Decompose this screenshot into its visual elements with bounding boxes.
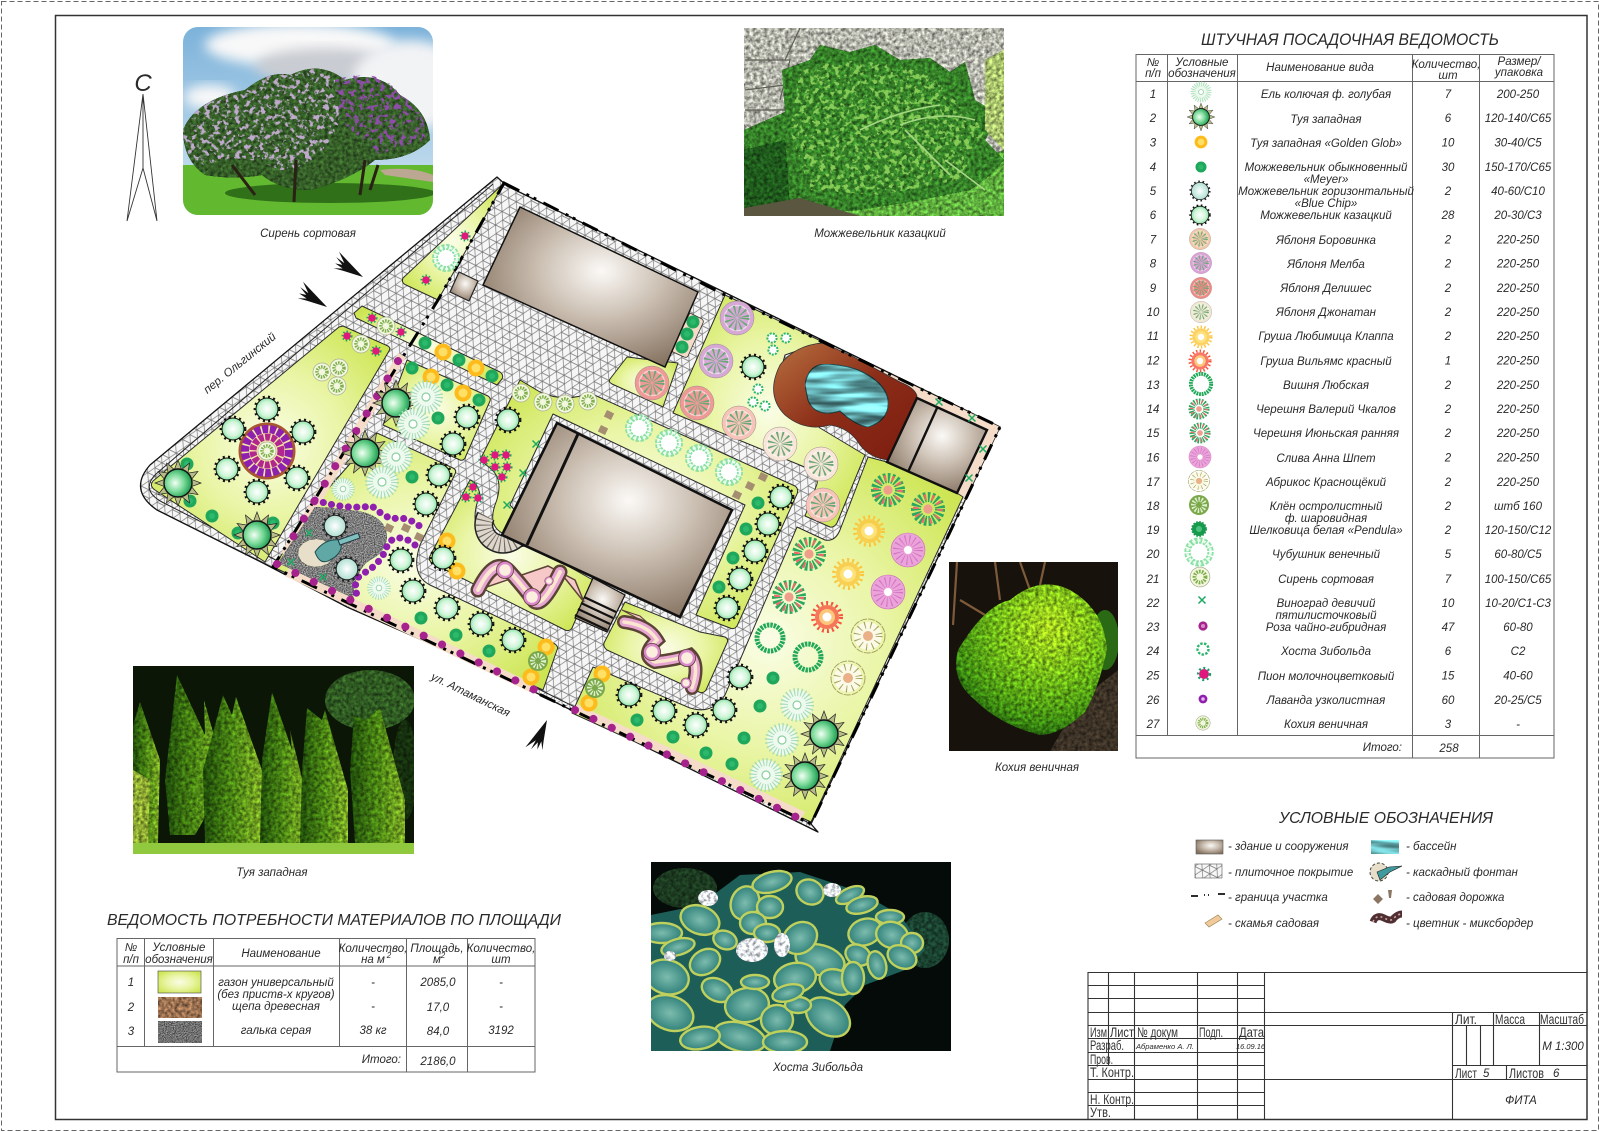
spiral stair [484,516,520,544]
row numbers: 19 [1147,525,1160,537]
species names: Можжевельник обыкновенный [1245,162,1408,174]
sizes: 150-170/С65 [1485,162,1552,174]
sizes: 220-250 [1496,452,1540,464]
sizes: 220-250 [1496,283,1540,295]
row numbers: 6 [1150,210,1157,222]
stamp labels: Масштаб [1540,1011,1584,1027]
materials header: п/п [123,954,140,966]
material rows: - [499,977,503,989]
apple trees [635,301,840,522]
north arrow: С [134,70,152,97]
row numbers: 14 [1147,404,1159,416]
sizes: 120-140/С65 [1485,113,1552,125]
legend labels: - здание и сооружения [1228,841,1349,853]
parthenocissus vines [288,398,986,580]
quantities: 15 [1442,670,1455,682]
materials total: Итого: [362,1054,401,1066]
stamp labels: Лит. [1455,1011,1477,1027]
table header: Размер/ [1498,56,1542,68]
stamp values: 6 [1553,1068,1560,1080]
row numbers: 26 [1146,695,1160,707]
sizes [1485,89,1552,731]
species names: Яблоня Мелба [1286,259,1365,271]
species names: Черешня Июньская ранняя [1253,428,1399,440]
pool [805,364,888,427]
sizes: 220-250 [1496,258,1540,270]
sizes: С2 [1511,646,1526,658]
material rows: (без приств-х кругов) [217,989,335,1001]
table header [1145,56,1543,82]
stamp labels: № докум [1137,1024,1178,1040]
materials header [123,942,535,966]
material rows: - [371,977,375,989]
row numbers: 3 [1150,138,1157,150]
caption: thuja: Туя западная [236,867,308,879]
species names: Роза чайно-гибридная [1266,622,1386,634]
street label: lane: пер. Ольгинский [202,331,279,396]
lawns [151,183,963,822]
golden thuja [422,344,610,712]
quantities: 7 [1445,574,1452,586]
sizes: 40-60/С10 [1491,186,1545,198]
species names: Чубушник венечный [1272,549,1381,561]
quantities: 2 [1444,283,1452,295]
title block [1088,972,1587,1120]
stamp labels: Т. Контр. [1090,1064,1134,1080]
north arrow [127,70,157,221]
stamp labels [1090,1011,1584,1120]
quantities: 2 [1444,452,1452,464]
planting table title: ШТУЧНАЯ ПОСАДОЧНАЯ ВЕДОМОСТЬ [1201,31,1499,49]
quantities: 2 [1444,501,1452,513]
materials header: № [125,942,138,954]
street label: street: ул. Атаманская [428,671,512,720]
small kiosk [450,272,478,301]
sizes: 100-150/С65 [1485,574,1552,586]
quantities: 1 [1445,356,1451,368]
species names: ф. шаровидная [1285,513,1367,525]
gravel garden [278,507,387,598]
row numbers: 21 [1146,574,1159,586]
cherry, pear, plum, apricot [528,478,940,698]
quantities: 2 [1444,186,1452,198]
site plan [141,177,1000,832]
material rows: 2085,0 [419,977,456,989]
species names: Яблоня Боровинка [1275,235,1376,247]
row numbers: 7 [1150,234,1157,246]
sizes: 220-250 [1496,477,1540,489]
sizes: 220-250 [1496,234,1540,246]
materials header: 2 [386,951,392,960]
photo: lilac [183,27,433,215]
mixborder bed 2 [622,610,696,688]
quantities: 2 [1444,331,1452,343]
material rows: 17,0 [427,1002,450,1014]
row numbers: 22 [1146,598,1160,610]
material rows: 1 [128,977,134,989]
material rows [127,977,514,1038]
species names: Пион молочноцветковый [1258,671,1395,683]
table header: № [1147,57,1160,69]
quantities: 47 [1442,622,1455,634]
materials header: 2 [440,951,446,960]
caption: juniper: Можжевельник казацкий [814,228,946,240]
quantities: 7 [1445,89,1452,101]
material rows: 3 [128,1026,135,1038]
peach west and south strips [285,355,803,816]
material rows: 84,0 [427,1026,450,1038]
row numbers: 24 [1146,646,1159,658]
row numbers: 2 [1149,113,1157,125]
quantities: 6 [1445,646,1452,658]
row numbers: 17 [1147,477,1160,489]
photo: juniper [744,28,1004,216]
photo: hosta [641,862,951,1057]
stamp values [1135,1041,1584,1107]
stamp labels: Лист [1110,1024,1134,1040]
street inner line [149,184,811,824]
species names: Яблоня Джонатан [1275,307,1377,319]
table header: упаковка [1494,67,1543,79]
junipers: dots [180,316,780,770]
legend labels: - садовая дорожка [1406,892,1504,904]
stamp labels: Лист [1455,1065,1477,1081]
sizes: 40-60 [1503,670,1533,682]
stamp values: 16.09.16 [1236,1042,1266,1051]
species names: Туя западная «Golden Glob» [1250,138,1402,150]
stamp values: ФИТА [1505,1095,1537,1107]
caption: kochia: Кохия веничная [995,762,1079,774]
materials header: Количество, [467,943,535,955]
species names: «Meyer» [1304,174,1348,186]
material rows: - [499,1001,503,1013]
row numbers: 12 [1147,356,1160,368]
mixborder bed 1 [478,561,584,606]
peach planting pad [672,313,703,357]
legend labels: - граница участка [1228,892,1328,904]
stamp values: М 1:300 [1542,1041,1584,1053]
material rows: 2 [127,1002,135,1014]
stamp labels: Разраб. [1090,1037,1124,1053]
total row: 258 [1438,743,1459,755]
row numbers: 5 [1150,186,1157,198]
quantities: 30 [1442,162,1455,174]
materials table title: ВЕДОМОСТЬ ПОТРЕБНОСТИ МАТЕРИАЛОВ ПО ПЛОЩАДИ [107,912,562,929]
sizes: 220-250 [1496,404,1540,416]
species names: пятилисточковый [1275,610,1377,622]
species names: Ель колючая ф. голубая [1261,89,1391,101]
species names: Абрикос Краснощёкий [1265,477,1387,489]
entrance porch and steps [575,578,625,632]
sizes: 220-250 [1496,380,1540,392]
species names: Черешня Валерий Чкалов [1256,404,1396,416]
legend [1191,840,1534,930]
sizes: 60-80/С5 [1494,549,1542,561]
row numbers: 9 [1150,283,1157,295]
species names: Слива Анна Шпет [1276,453,1376,465]
legend labels: - плиточное покрытие [1228,867,1353,879]
sizes: 200-250 [1496,89,1540,101]
entrance arrows [295,252,553,753]
peonies [342,231,512,503]
quantities: 6 [1445,113,1452,125]
quantities: 10 [1442,138,1455,150]
row numbers: 8 [1150,258,1157,270]
sizes: 120-150/С12 [1485,525,1552,537]
symbols column [1186,83,1215,730]
photo: thuja [133,666,417,854]
quantities: 2 [1444,404,1452,416]
row numbers: 23 [1146,622,1160,634]
row numbers: 1 [1150,89,1156,101]
quantities: 10 [1442,598,1455,610]
quantities: 5 [1445,549,1452,561]
pavilion [887,398,987,493]
table header: обозначения [1168,68,1236,80]
species names: «Blue Chip» [1295,198,1357,210]
sizes: 220-250 [1496,428,1540,440]
row numbers: 18 [1147,501,1160,513]
row numbers: 20 [1146,549,1160,561]
material swatches [158,971,202,1043]
quantities: 2 [1444,380,1452,392]
building: north [483,207,698,367]
mock orange [434,246,741,484]
material rows: галька серая [241,1025,311,1037]
sizes: 220-250 [1496,356,1540,368]
stamp labels: Утв. [1090,1104,1111,1120]
quantities: 60 [1442,695,1455,707]
quantities: 2 [1444,428,1452,440]
sizes: 220-250 [1496,307,1540,319]
materials header: Наименование [241,948,321,960]
materials total [362,1054,456,1068]
quantities [1441,89,1455,731]
sizes: 60-80 [1503,622,1533,634]
rose rows [277,361,796,817]
materials header: обозначения [145,954,213,966]
sizes: - [1516,719,1520,731]
peach east strip [823,342,1000,500]
species names: Груша Вильямс красный [1260,356,1392,368]
sizes: 20-30/С3 [1493,210,1542,222]
legend labels: - бассейн [1406,841,1457,853]
legend labels [1228,841,1534,930]
blue spruce [332,382,812,790]
blue chip juniper [323,514,359,581]
species names: Сирень сортовая [1278,574,1374,586]
row numbers: 10 [1147,307,1160,319]
materials total: 2186,0 [419,1056,456,1068]
lavender rows [315,500,423,597]
quantities: 3 [1445,719,1452,731]
row numbers: 16 [1147,452,1160,464]
row numbers: 27 [1146,719,1160,731]
sizes: 10-20/С1-С3 [1485,598,1552,610]
material rows: 38 кг [359,1025,387,1037]
legend swatches [1191,840,1402,927]
lilac shrubs [313,317,597,413]
species names: Туя западная [1290,114,1362,126]
building: central [502,423,732,617]
quantities: 2 [1444,525,1452,537]
materials header: на м [361,954,385,966]
garden path tiles [384,410,768,542]
species names: Груша Любимица Клаппа [1258,331,1394,343]
sizes: 220-250 [1496,331,1540,343]
materials header: м [433,954,441,966]
materials header: Площадь, [410,943,464,955]
materials header: Условные [152,942,205,954]
cossack juniper [215,355,793,737]
materials header: шт [491,954,511,966]
species names: Можжевельник казацкий [1260,210,1392,222]
caption: lilac: Сирень сортовая [260,228,356,240]
species names: Виноград девичий [1277,598,1376,610]
material rows: - [371,1001,375,1013]
total row: Итого: [1363,742,1402,754]
stamp labels: Подп. [1199,1024,1223,1040]
materials table [117,938,535,1072]
table header: Условные [1175,57,1228,69]
quantities: 28 [1441,210,1455,222]
terrace [774,343,917,460]
sizes: штб 160 [1494,501,1543,513]
quantities: 2 [1444,477,1452,489]
cascade fountain [298,533,360,567]
species names: Кохия веничная [1284,719,1368,731]
species names: Хоста Зибольда [1280,646,1371,658]
legend title: УСЛОВНЫЕ ОБОЗНАЧЕНИЯ [1278,810,1493,827]
stamp labels: Пров. [1090,1051,1113,1067]
row numbers: 13 [1147,380,1160,392]
materials header: Количество, [339,943,407,955]
stamp values: Абраменко А. Л. [1135,1042,1194,1051]
legend labels: - скамья садовая [1228,918,1319,930]
species names: Лаванда узколистная [1266,695,1385,707]
quantities: 2 [1444,258,1452,270]
row numbers: 25 [1146,670,1160,682]
stamp labels: Изм [1090,1024,1107,1040]
total row [1363,742,1459,755]
stamp labels: Н. Контр. [1090,1091,1134,1107]
sizes: 30-40/С5 [1494,138,1542,150]
row numbers: 15 [1147,428,1160,440]
photo: kochia [949,562,1119,751]
table header: п/п [1145,68,1162,80]
row numbers [1146,89,1160,731]
caption: hosta: Хоста Зибольда [772,1062,863,1074]
stamp labels: Масса [1495,1011,1525,1027]
planting table [1136,54,1554,758]
quantities: 2 [1444,234,1452,246]
western thuja [155,380,847,799]
rose bed [240,424,294,478]
legend labels: - каскадный фонтан [1406,867,1518,879]
species names: Шелковица белая «Pendula» [1249,525,1403,537]
stamp labels: Дата [1239,1024,1264,1040]
material rows: газон универсальный [218,977,334,989]
stamp labels: Листов [1509,1065,1544,1081]
hosta [748,333,791,411]
species names: Клён остролистный [1270,501,1383,513]
row numbers: 11 [1147,331,1159,343]
sizes: 20-25/С5 [1493,695,1542,707]
table header: Количество, [1412,59,1480,71]
legend labels: - цветник - миксбордер [1406,918,1534,930]
species names: Можжевельник горизонтальный [1238,186,1414,198]
site boundary [273,183,1000,824]
material rows: 3192 [488,1025,514,1037]
species names: Яблоня Делишес [1279,283,1372,295]
species names [1238,89,1414,731]
quantities: 2 [1444,307,1452,319]
row numbers: 4 [1150,162,1156,174]
material rows: щепа древесная [232,1001,320,1013]
table header: Наименование вида [1266,62,1374,74]
paving and street edge [141,177,1000,832]
stamp values: 5 [1483,1068,1490,1080]
table header: шт [1438,70,1458,82]
species names: Вишня Любская [1283,380,1369,392]
